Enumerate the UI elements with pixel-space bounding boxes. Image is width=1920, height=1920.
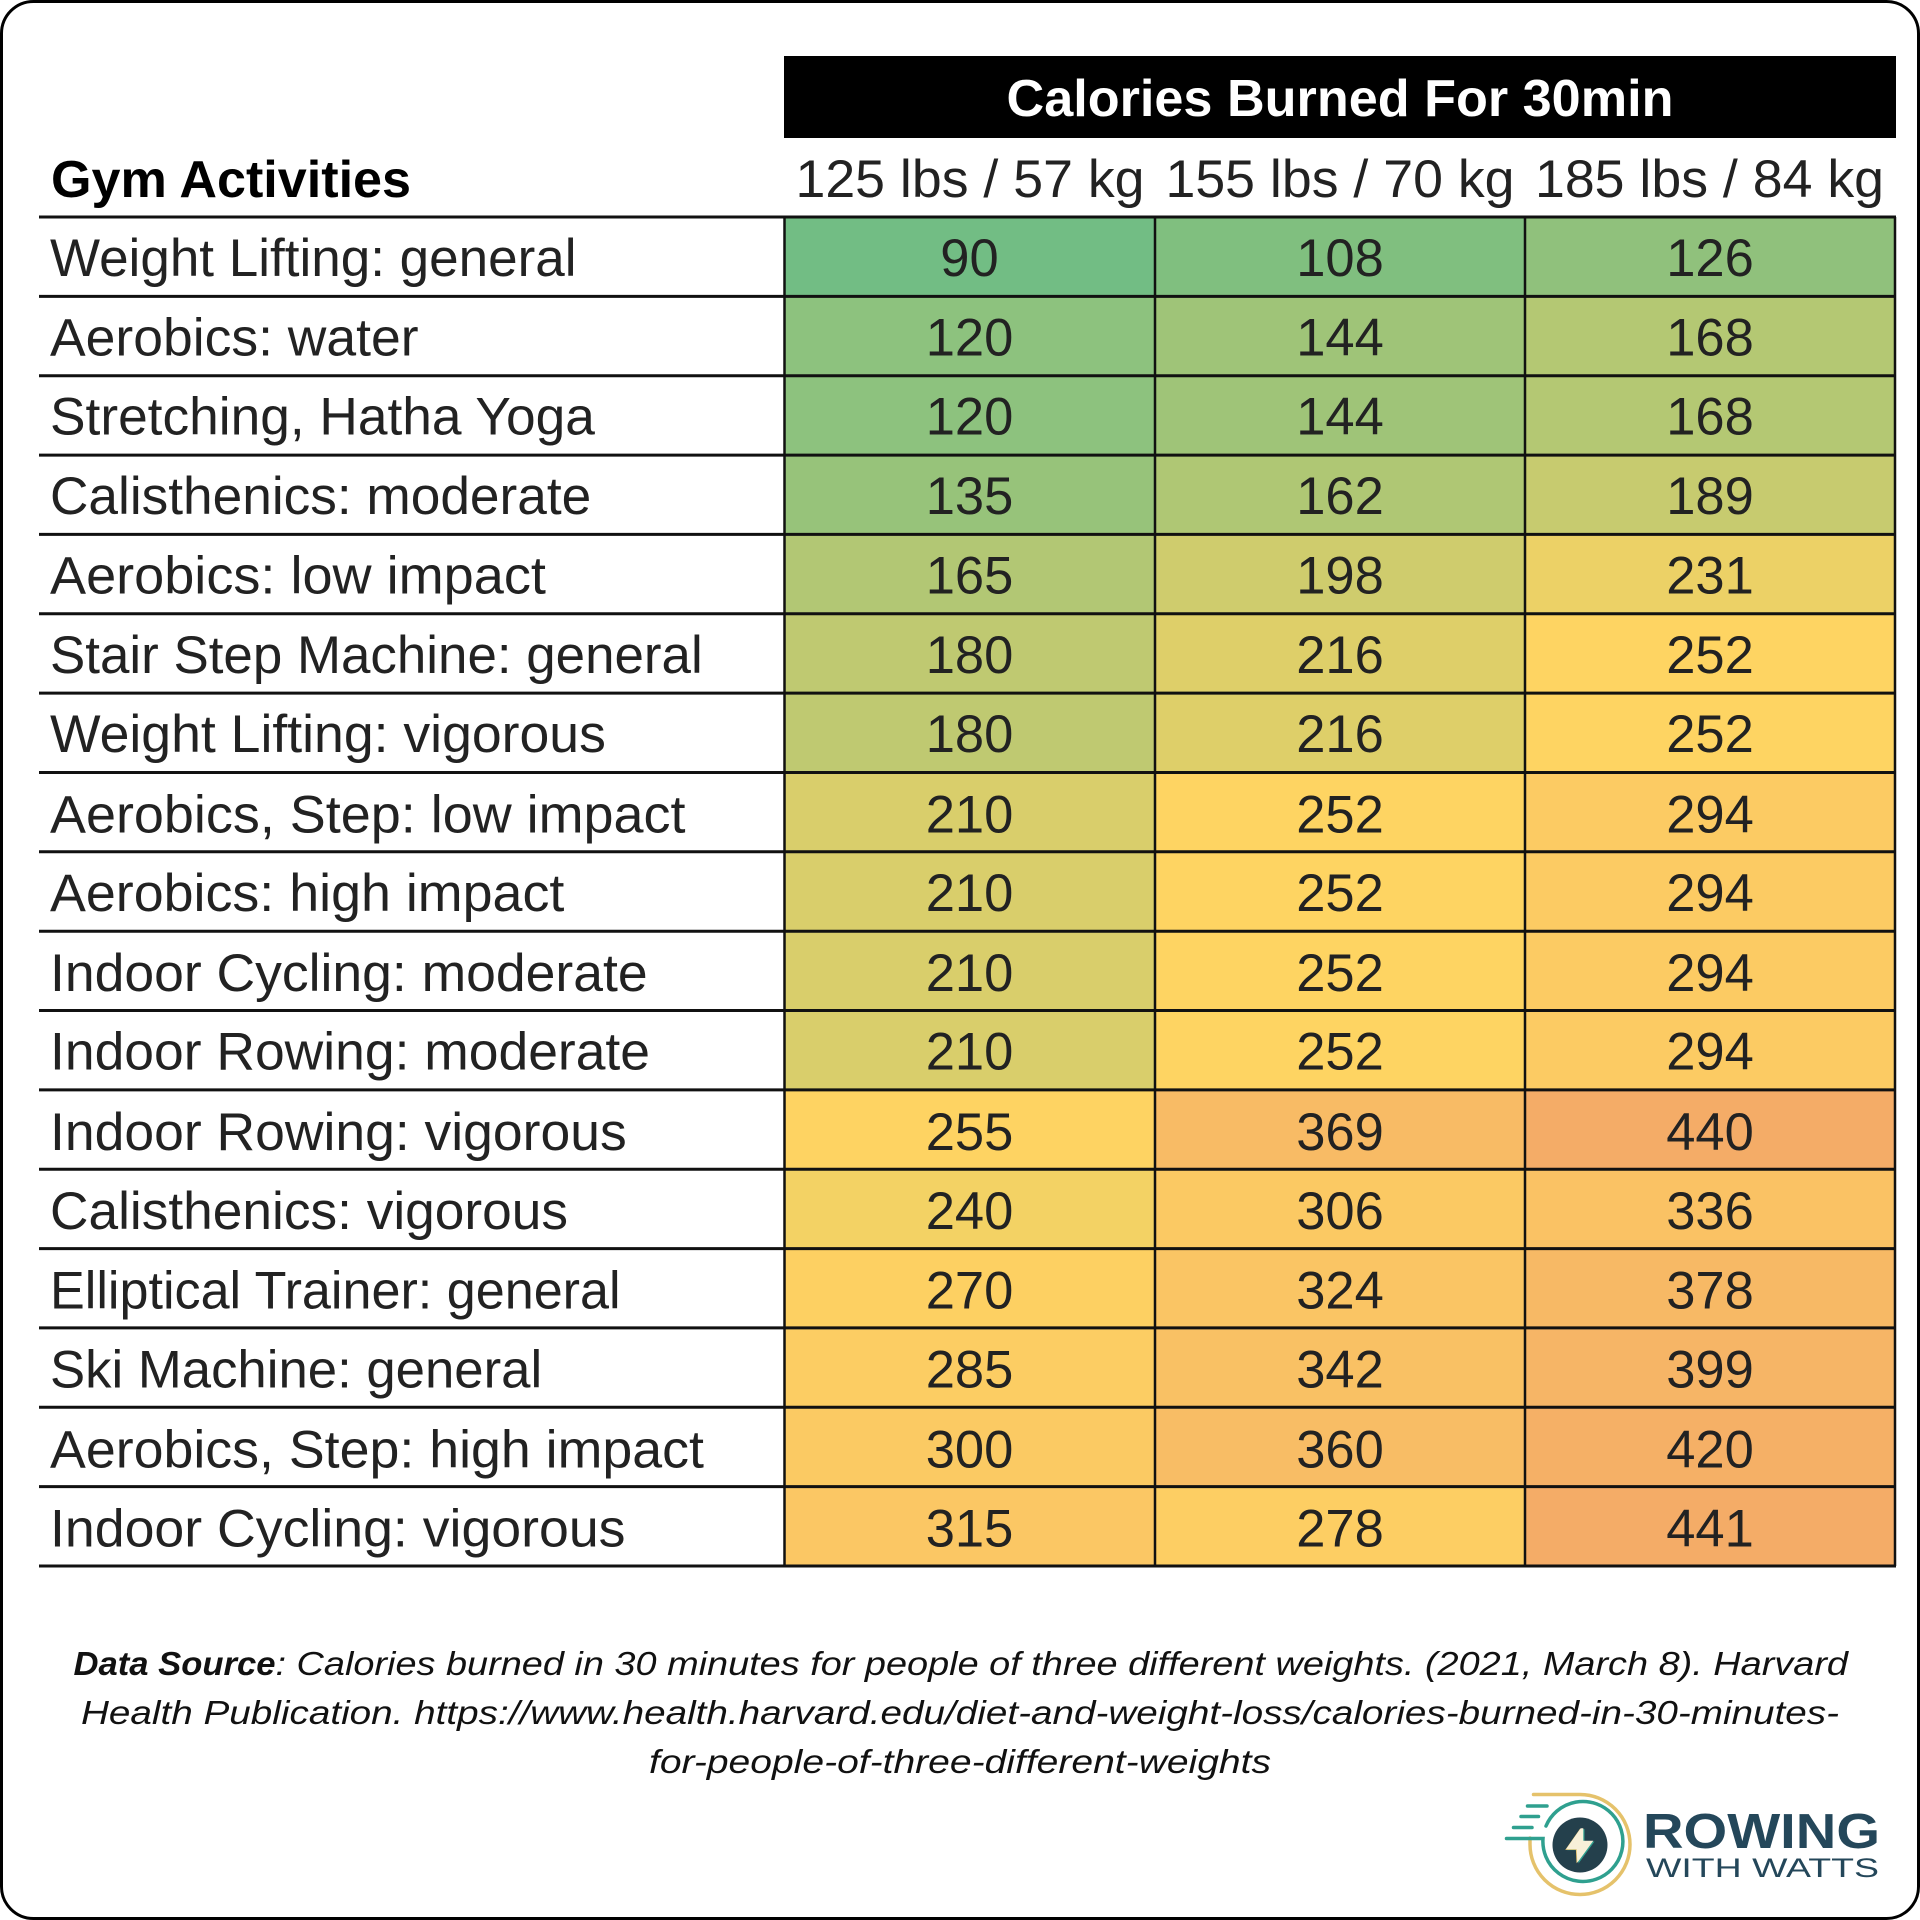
row: Indoor Rowing: vigorous: 369 — [1296, 1103, 1384, 1162]
data source note: Health Publication. https://www.health.harvard.edu/diet-and-weight-loss/calories-burned-in-30-minutes- — [81, 1694, 1839, 1731]
row: Weight Lifting: general: 108 — [1296, 229, 1384, 288]
row: Aerobics: water — [50, 296, 1895, 376]
row: Indoor Rowing: vigorous: Indoor Rowing: vigorous — [50, 1103, 627, 1162]
row: Ski Machine: general: 285 — [926, 1340, 1013, 1400]
row: Aerobics: high impact: Aerobics: high impact — [50, 864, 565, 923]
icon: speed lines — [1514, 1806, 1547, 1828]
icon: teal ring — [1506, 1801, 1623, 1881]
row: Indoor Rowing: moderate: 294 — [1666, 1022, 1754, 1082]
row: Aerobics, Step: low impact: 294 — [1666, 786, 1754, 844]
row: Indoor Rowing: moderate: 210 — [926, 1022, 1013, 1082]
row: Aerobics, Step: low impact: Aerobics, Step: low impact — [50, 786, 686, 844]
row: Stretching, Hatha Yoga: 120 — [926, 388, 1013, 447]
title banner: Calories Burned For 30min — [1006, 70, 1674, 128]
row: Aerobics, Step: high impact: 300 — [926, 1420, 1013, 1479]
column heading: 125 lbs: 125 lbs / 57 kg — [796, 150, 1144, 209]
row: Weight Lifting: vigorous: Weight Lifting: vigorous — [50, 705, 606, 764]
row: Stair Step Machine: general: 180 — [926, 626, 1013, 685]
row: Indoor Cycling: moderate: Indoor Cycling: moderate — [50, 944, 648, 1003]
logo: Rowing With Watts — [1506, 1794, 1880, 1894]
row: Elliptical Trainer: general: 270 — [926, 1262, 1013, 1321]
row: Calisthenics: moderate: 135 — [926, 467, 1013, 526]
row: Ski Machine: general — [50, 1328, 1895, 1407]
row: Aerobics: high impact: 294 — [1666, 864, 1754, 923]
row: Weight Lifting: vigorous: 180 — [926, 705, 1013, 764]
row: Calisthenics: moderate: 189 — [1666, 467, 1754, 526]
row: Indoor Cycling: vigorous: 278 — [1296, 1500, 1384, 1559]
row: Aerobics: low impact: 231 — [1666, 546, 1754, 605]
row: Indoor Cycling: vigorous — [50, 1487, 1895, 1566]
row: Indoor Cycling: vigorous: 315 — [926, 1500, 1013, 1559]
row: Elliptical Trainer: general — [50, 1249, 1895, 1328]
row: Indoor Cycling: moderate: 252 — [1296, 944, 1384, 1003]
row: Aerobics, Step: high impact: Aerobics, Step: high impact — [50, 1420, 704, 1479]
row: Stair Step Machine: general: Stair Step Machine: general — [50, 626, 703, 685]
row: Stretching, Hatha Yoga: 144 — [1296, 388, 1384, 447]
row: Aerobics, Step: low impact: 252 — [1296, 786, 1384, 844]
row: Aerobics: water: Aerobics: water — [50, 308, 419, 367]
row: Indoor Rowing: vigorous: 440 — [1666, 1103, 1754, 1162]
heading: Gym Activities: Gym Activities — [51, 151, 411, 209]
row: Calisthenics: vigorous: 336 — [1666, 1182, 1754, 1241]
row: Ski Machine: general: Ski Machine: general — [50, 1340, 542, 1400]
row: Elliptical Trainer: general: 378 — [1666, 1262, 1754, 1321]
data source note — [74, 1645, 1850, 1780]
row: Weight Lifting: general — [50, 217, 1895, 296]
row: Calisthenics: vigorous: Calisthenics: vigorous — [50, 1182, 568, 1241]
row: Indoor Rowing: moderate: Indoor Rowing: moderate — [50, 1022, 650, 1082]
row: Aerobics: water: 144 — [1296, 308, 1384, 367]
row: Weight Lifting: general: 126 — [1666, 229, 1754, 288]
row: Calisthenics: moderate: 162 — [1296, 467, 1384, 526]
row: Aerobics, Step: high impact — [50, 1407, 1895, 1487]
row: Calisthenics: vigorous: 306 — [1296, 1182, 1384, 1241]
row: Stretching, Hatha Yoga: Stretching, Hatha Yoga — [50, 388, 596, 447]
icon: dark disc — [1552, 1818, 1608, 1872]
row: Aerobics, Step: low impact: 210 — [926, 786, 1013, 844]
data source note: : Calories burned in 30 minutes for people of three different weights. (2021, March 8). Harvard — [276, 1645, 1850, 1682]
row: Aerobics: low impact: 198 — [1296, 546, 1384, 605]
row: Stair Step Machine: general: 216 — [1296, 626, 1384, 685]
column heading: 155 lbs: 155 lbs / 70 kg — [1166, 150, 1514, 209]
row: Aerobics: water: 120 — [926, 308, 1013, 367]
row: Aerobics: high impact: 210 — [926, 864, 1013, 923]
row: Aerobics, Step: low impact — [50, 772, 1895, 852]
row: Aerobics: low impact: 165 — [926, 546, 1013, 605]
row: Aerobics, Step: high impact: 360 — [1296, 1420, 1384, 1479]
row: Aerobics: high impact — [50, 852, 1895, 931]
row: Calisthenics: vigorous — [50, 1169, 1895, 1249]
row: Weight Lifting: general: Weight Lifting: general — [50, 229, 576, 288]
row: Indoor Cycling: moderate — [50, 931, 1895, 1011]
row: Indoor Cycling: vigorous: 441 — [1666, 1500, 1754, 1559]
wordmark: ROWING: ROWING — [1643, 1805, 1880, 1859]
heatmap table — [39, 217, 1896, 1566]
row: Elliptical Trainer: general: 324 — [1296, 1262, 1384, 1321]
row: Stair Step Machine: general — [50, 614, 1895, 693]
row: Weight Lifting: vigorous — [50, 693, 1895, 772]
row: Aerobics, Step: high impact: 420 — [1666, 1420, 1754, 1479]
data source note: for-people-of-three-different-weights — [649, 1743, 1271, 1780]
row: Indoor Rowing: vigorous — [50, 1090, 1895, 1169]
row: Stair Step Machine: general: 252 — [1666, 626, 1754, 685]
row: Aerobics: low impact — [50, 534, 1895, 614]
row: Calisthenics: vigorous: 240 — [926, 1182, 1013, 1241]
row: Calisthenics: moderate: Calisthenics: moderate — [50, 467, 591, 526]
row: Calisthenics: moderate — [50, 455, 1895, 534]
row: Elliptical Trainer: general: Elliptical Trainer: general — [50, 1262, 621, 1321]
title banner — [784, 56, 1896, 138]
row: Indoor Cycling: moderate: 210 — [926, 944, 1013, 1003]
row: Weight Lifting: vigorous: 216 — [1296, 705, 1384, 764]
icon: lightning bolt — [1565, 1828, 1594, 1864]
row: Stretching, Hatha Yoga — [50, 376, 1895, 455]
row: Indoor Rowing: moderate: 252 — [1296, 1022, 1384, 1082]
row: Weight Lifting: vigorous: 252 — [1666, 705, 1754, 764]
row: Indoor Rowing: vigorous: 255 — [926, 1103, 1013, 1162]
row: Aerobics: water: 168 — [1666, 308, 1754, 367]
row: Indoor Cycling: moderate: 294 — [1666, 944, 1754, 1003]
icon: gold ring — [1530, 1794, 1630, 1894]
row: Aerobics: low impact: Aerobics: low impact — [50, 546, 546, 605]
row: Weight Lifting: general: 90 — [940, 229, 999, 288]
wordmark: WITH WATTS: WITH WATTS — [1646, 1853, 1879, 1883]
row: Ski Machine: general: 399 — [1666, 1340, 1754, 1400]
row: Indoor Rowing: moderate — [50, 1010, 1895, 1090]
column heading: 185 lbs: 185 lbs / 84 kg — [1535, 150, 1884, 209]
row: Ski Machine: general: 342 — [1296, 1340, 1384, 1400]
data source note: Data Source — [74, 1645, 276, 1682]
row: Aerobics: high impact: 252 — [1296, 864, 1384, 923]
row: Stretching, Hatha Yoga: 168 — [1666, 388, 1754, 447]
row: Indoor Cycling: vigorous: Indoor Cycling: vigorous — [50, 1500, 626, 1559]
